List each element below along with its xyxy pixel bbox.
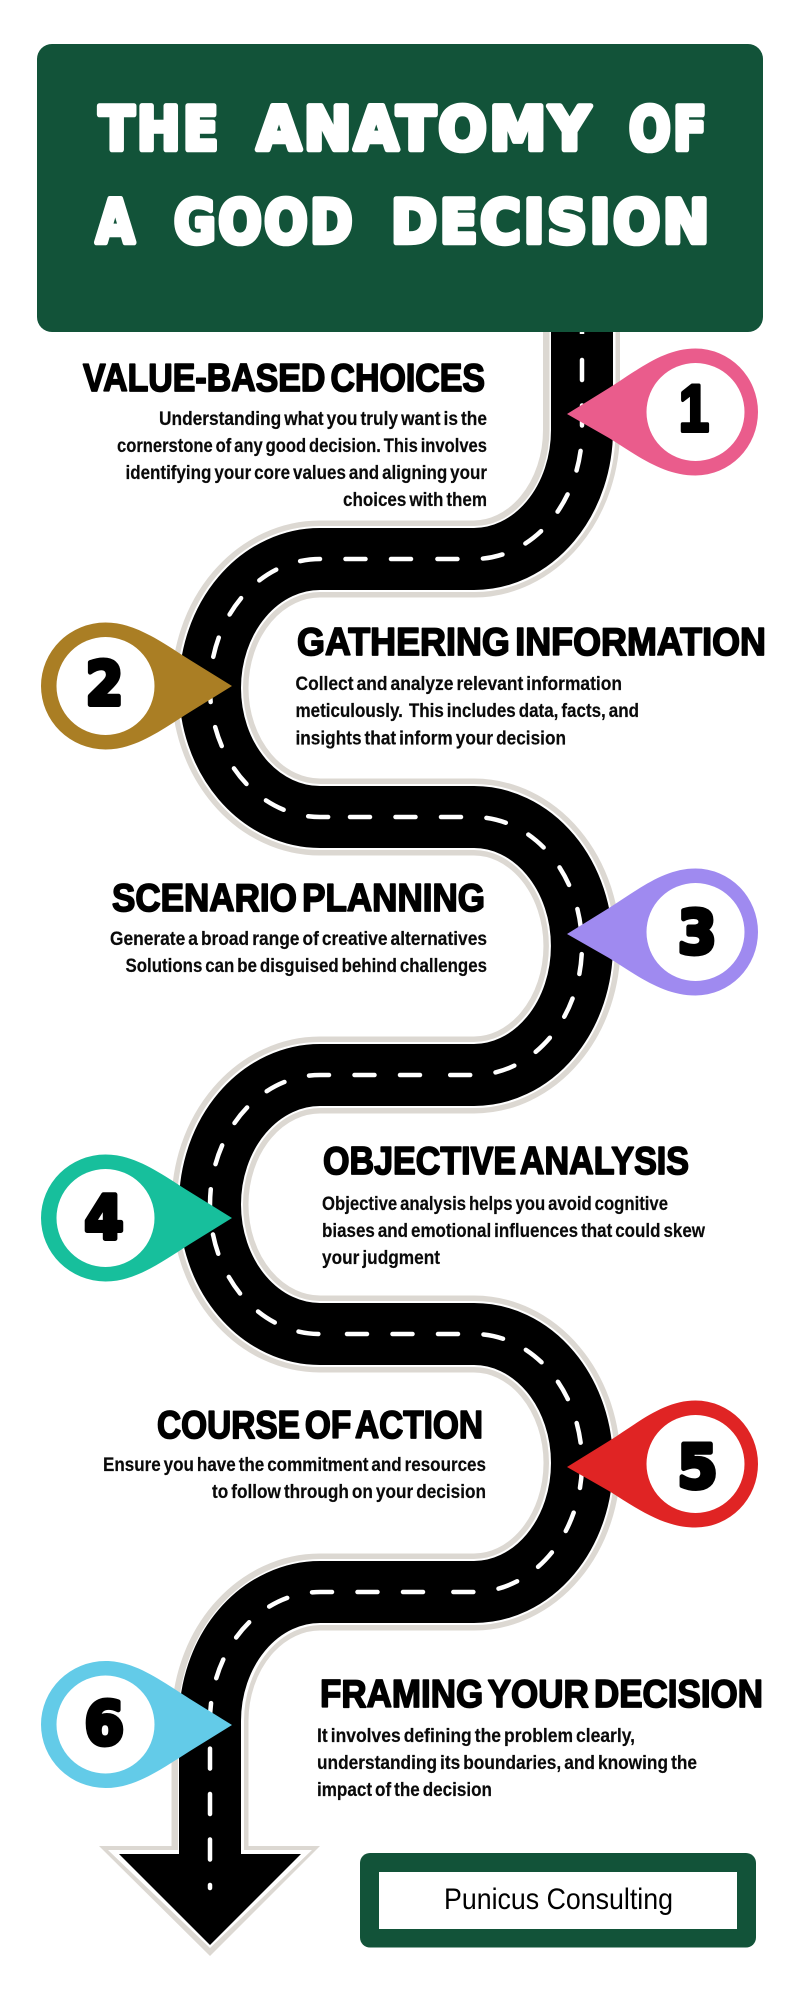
body text 4: Objective analysis helps you avoid cognitive	[322, 1193, 668, 1215]
step 6: framing your decision	[317, 1673, 763, 1801]
pin 6	[41, 1661, 232, 1788]
body text 5: to follow through on your decision	[212, 1481, 486, 1503]
pin 4	[41, 1154, 232, 1282]
body text 2: Collect and analyze relevant information	[296, 673, 622, 695]
body text 2: meticulously. This includes data, facts, and	[296, 700, 639, 722]
title text line 2: DECISION	[391, 187, 712, 257]
brand name: Punicus Consulting	[444, 1883, 673, 1916]
body text 6: impact of the decision	[317, 1779, 492, 1801]
number 2: 2	[86, 650, 123, 720]
number 3: 3	[678, 898, 716, 968]
body text 2	[296, 673, 639, 750]
heading 6: FRAMING YOUR DECISION	[320, 1673, 763, 1716]
body text 3: Generate a broad range of creative alternatives	[110, 928, 487, 950]
pin 5	[567, 1400, 758, 1528]
body text 3: Solutions can be disguised behind challenges	[126, 955, 487, 977]
body text 4	[322, 1193, 706, 1269]
number 4: 4	[84, 1184, 124, 1254]
heading 1: VALUE-BASED CHOICES	[83, 357, 485, 400]
step 4: objective analysis	[322, 1140, 706, 1269]
body text 2: insights that inform your decision	[296, 728, 566, 750]
title text line 1: OF	[629, 94, 709, 164]
number 5: 5	[678, 1432, 718, 1502]
heading 2: GATHERING INFORMATION	[297, 621, 766, 664]
body text 6: It involves defining the problem clearly,	[317, 1725, 635, 1747]
title text line 2	[96, 187, 712, 257]
body text 1: identifying your core values and aligning your	[126, 462, 487, 484]
body text 4: biases and emotional influences that could skew	[322, 1220, 706, 1242]
body text 6	[317, 1725, 697, 1801]
heading 5: COURSE OF ACTION	[157, 1404, 483, 1447]
body text 1: Understanding what you truly want is the	[159, 408, 487, 430]
body text 5	[103, 1454, 486, 1503]
body text 6: understanding its boundaries, and knowing the	[317, 1752, 697, 1774]
number 1: 1	[679, 371, 709, 445]
title text line 2: A	[96, 187, 137, 257]
step 5: course of action	[103, 1404, 486, 1503]
heading 3: SCENARIO PLANNING	[112, 877, 485, 920]
pin 3	[567, 868, 758, 996]
body text 5: Ensure you have the commitment and resources	[103, 1454, 486, 1476]
body text 1: cornerstone of any good decision. This involves	[117, 435, 487, 457]
body text 3	[110, 928, 487, 977]
winding road with arrow	[99, 320, 582, 1956]
step 3: scenario planning	[110, 877, 487, 977]
pin 2	[41, 622, 232, 750]
step 2: gathering information	[296, 621, 766, 750]
body text 1	[117, 408, 487, 511]
heading 4: OBJECTIVE ANALYSIS	[323, 1140, 689, 1183]
body text 4: your judgment	[322, 1247, 440, 1269]
title text line 1: ANATOMY	[257, 94, 593, 164]
footer brand box	[360, 1853, 756, 1948]
step 1: value-based choices	[83, 357, 487, 511]
pin 1	[567, 348, 758, 476]
title text line 1	[99, 94, 709, 164]
title banner	[37, 44, 763, 332]
number 6: 6	[84, 1689, 124, 1759]
title text line 1: THE	[99, 94, 221, 164]
body text 1: choices with them	[343, 489, 487, 511]
title text line 2: GOOD	[174, 187, 355, 257]
